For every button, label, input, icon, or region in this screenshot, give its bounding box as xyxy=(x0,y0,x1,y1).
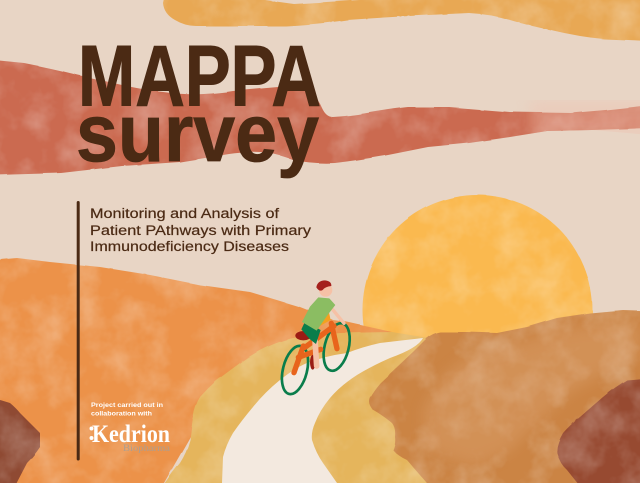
left orange hill xyxy=(0,258,392,483)
red watercolor band xyxy=(0,60,640,175)
bike frame xyxy=(294,323,337,373)
white winding road xyxy=(222,338,423,483)
Kedrion logo xyxy=(90,421,170,453)
title: MAPPA survey xyxy=(76,28,321,179)
subtitle xyxy=(90,206,311,254)
subtitle line 1: Monitoring and Analysis of xyxy=(90,206,279,221)
rear wheel xyxy=(277,343,313,397)
hair xyxy=(316,280,331,291)
subtitle line 3: Immunodeficiency Diseases xyxy=(90,239,289,254)
shorts xyxy=(301,322,321,344)
shoe xyxy=(310,355,315,370)
saddle xyxy=(295,331,311,340)
title line MAPPA: MAPPA xyxy=(78,28,321,124)
frame accent xyxy=(317,309,331,327)
sun xyxy=(362,195,592,425)
head xyxy=(319,283,332,297)
torso xyxy=(302,297,335,331)
vertical divider bar xyxy=(77,201,80,460)
leg xyxy=(315,340,317,366)
arm xyxy=(332,308,344,323)
subtitle line 2: Patient PAthways with Primary xyxy=(90,223,311,238)
note line 1: Project carried out in xyxy=(91,402,163,409)
brown foreground hill xyxy=(369,310,640,483)
front wheel xyxy=(319,320,354,374)
title line survey: survey xyxy=(76,88,319,179)
logo K dots xyxy=(90,426,94,440)
logo wordmark: Kedrion xyxy=(92,421,170,448)
note line 2: collaboration with xyxy=(91,410,152,418)
dark red rock right xyxy=(557,378,640,483)
logo descriptor: Biopharma xyxy=(123,443,170,453)
collaboration note xyxy=(91,402,163,418)
dark red rock left xyxy=(0,398,40,483)
cyclist xyxy=(277,280,354,397)
yellow ground xyxy=(160,332,460,483)
lighter patch on brown hill xyxy=(423,323,640,467)
lighter right end of red band xyxy=(526,106,640,134)
yellow watercolor band xyxy=(163,0,640,41)
